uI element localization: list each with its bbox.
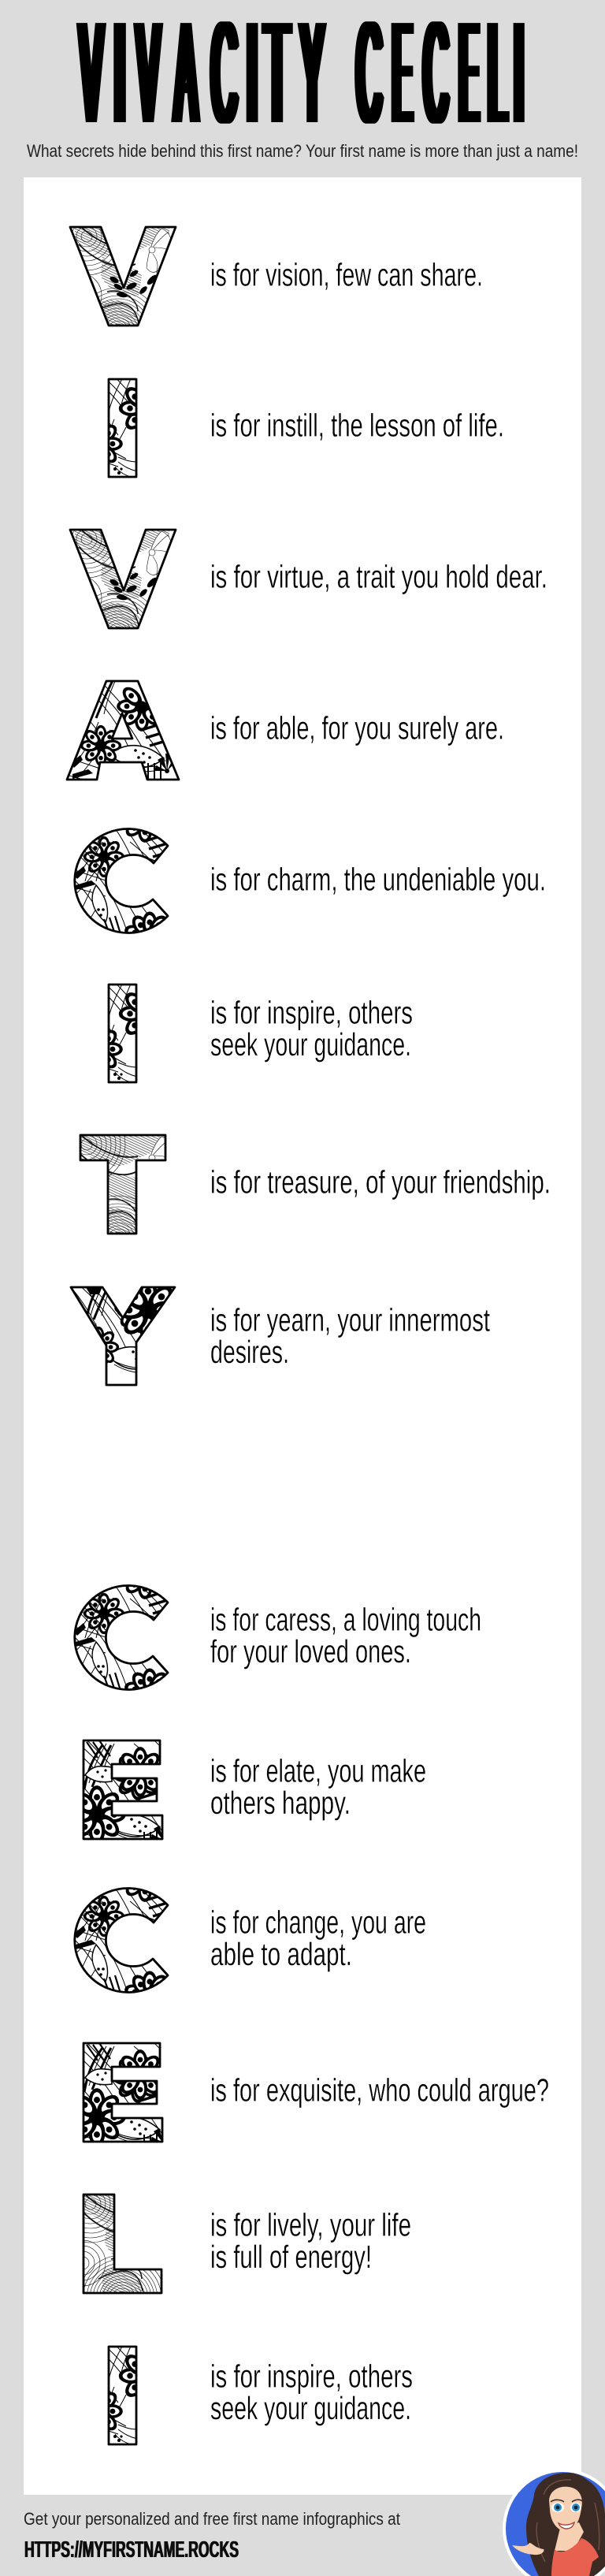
text: inspire [210, 2358, 413, 2426]
text: change [210, 1904, 426, 1972]
row: V vision [69, 225, 481, 326]
text: inspire [210, 995, 413, 1063]
text: elate: is for elate, you make [210, 1753, 426, 1789]
footer url: HTTPS://MYFIRSTNAME.ROCKS [24, 2537, 239, 2563]
text: lively: is full of energy! [210, 2239, 372, 2275]
row: I instill [107, 378, 503, 478]
row: V virtue [69, 528, 545, 629]
text: change: is for change, you are [210, 1904, 426, 1941]
text: caress [210, 1602, 481, 1670]
row: E exquisite [82, 2042, 548, 2142]
icon: letter C [73, 828, 169, 934]
row: C charm [73, 828, 544, 934]
text: lively: is for lively, your life [210, 2207, 411, 2243]
icon: letter V [69, 528, 176, 629]
icon: avatar [503, 2467, 605, 2576]
text: lively [210, 2207, 411, 2275]
icon: letter I [107, 984, 137, 1083]
text: inspire: seek your guidance. [210, 2390, 411, 2426]
text: caress: for your loved ones. [210, 1633, 411, 1670]
row: C caress [73, 1584, 481, 1691]
row: T treasure [79, 1134, 548, 1234]
row: A able [66, 679, 503, 780]
row: E elate [82, 1739, 425, 1840]
text: yearn: desires. [210, 1334, 289, 1370]
text: elate: others happy. [210, 1785, 351, 1821]
text: yearn: is for yearn, your innermost [210, 1302, 490, 1338]
text: inspire: seek your guidance. [210, 1026, 411, 1063]
row: I inspire [107, 2346, 412, 2445]
text: caress: is for caress, a loving touch [210, 1602, 481, 1638]
icon: letter A [66, 679, 180, 780]
text: yearn [210, 1302, 490, 1370]
text: inspire: is for inspire, others [210, 995, 413, 1031]
title [80, 0, 524, 153]
text: inspire: is for inspire, others [210, 2358, 413, 2395]
icon: letter E [82, 1739, 164, 1840]
icon: letter I [107, 2346, 137, 2445]
text: change: able to adapt. [210, 1936, 352, 1972]
text: vision: is for vision, few can share. [210, 257, 483, 293]
row: Y yearn [69, 1286, 490, 1386]
row: C change [73, 1887, 425, 1993]
row: I inspire [107, 984, 412, 1083]
icon: letter C [73, 1887, 169, 1993]
icon: letter L [82, 2193, 162, 2294]
row: L lively [82, 2193, 410, 2294]
icon: letter Y [69, 1286, 176, 1386]
icon: letter V [69, 225, 176, 326]
icon: letter T [79, 1134, 167, 1234]
footer text: Get your personalized and free first name infographics at [24, 2509, 400, 2529]
icon: letter I [107, 378, 137, 478]
icon: letter E [82, 2042, 164, 2142]
text: elate [210, 1753, 426, 1821]
icon: letter C [73, 1584, 169, 1691]
